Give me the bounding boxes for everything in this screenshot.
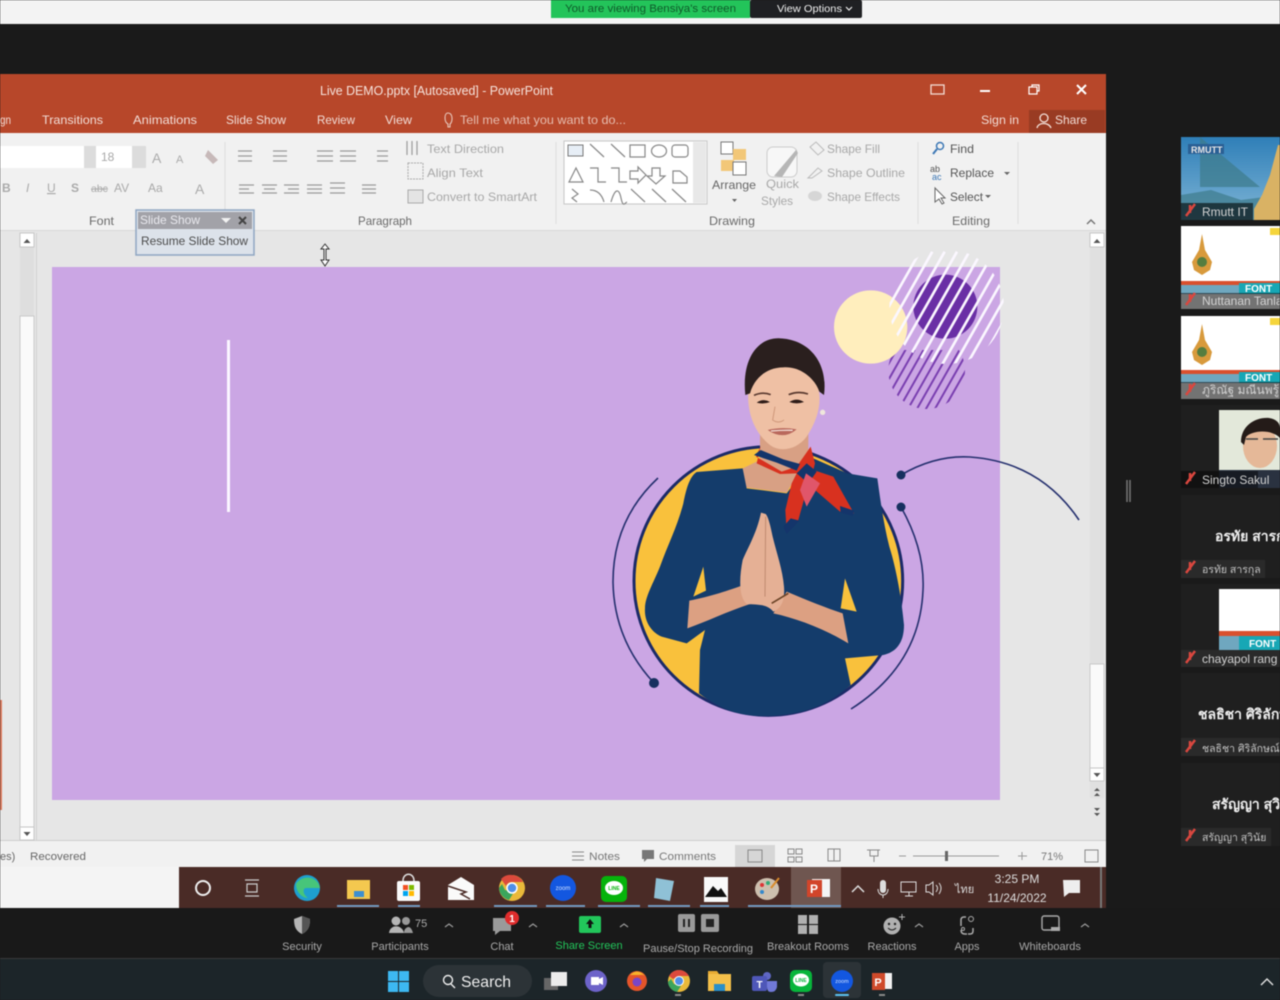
powerpoint title bar: [0, 74, 1106, 133]
face: [748, 365, 820, 449]
tile: Thai name 3: ชลธิชา ศิริลักษณ์: [1202, 742, 1280, 755]
ear and earring: [820, 410, 825, 415]
editing group: Select: [950, 190, 984, 204]
ribbon tabs: Sign in: [981, 113, 1019, 127]
font group: AV: [114, 181, 129, 195]
taskbar icons: P: [874, 977, 882, 989]
powerpoint status bar: 71%: [1041, 851, 1063, 863]
editing group: Editing: [952, 214, 990, 228]
bracelet: [772, 593, 788, 603]
chat: Chat: [490, 941, 514, 953]
tile: chayapol: FONT: [1249, 639, 1276, 650]
powerpoint title bar: Live DEMO.pptx [Autosaved] - PowerPoint: [320, 84, 554, 98]
ribbon tabs: Animations: [133, 113, 197, 127]
scarf: [756, 446, 854, 532]
font group: Aa: [148, 181, 163, 195]
app icon: chrome: [499, 875, 525, 901]
whiteboards: Whiteboards: [1019, 941, 1081, 953]
app icon: powerpoint: [807, 879, 830, 897]
purple striped circle: [888, 350, 966, 410]
zoom sharing banner: View Options: [777, 3, 842, 15]
powerpoint status bar: [0, 841, 1106, 867]
powerpoint status bar: es): [0, 851, 15, 863]
taskbar icons: LINE: [795, 978, 807, 984]
security: [282, 916, 322, 953]
app icon: edge: [294, 875, 320, 901]
connector arcs with dots: [613, 457, 1079, 709]
slide background: [52, 267, 1000, 800]
paragraph group: [238, 141, 538, 228]
tile: Rmutt IT: Rmutt IT: [1202, 205, 1249, 219]
tile: chayapol: chayapol rang: [1202, 652, 1277, 666]
brows: [754, 392, 808, 395]
slide show floating toolbar: [136, 210, 254, 255]
navy dress: [645, 458, 904, 716]
taskbar icons: T: [756, 980, 763, 991]
editing group: ac: [932, 172, 942, 182]
tile: Thai name 1: ภูริณัฐ มณีนพรู้: [1202, 383, 1280, 398]
windows logo: [388, 971, 409, 992]
tile: Thai name 4: [1181, 796, 1280, 846]
forearms: [687, 585, 848, 643]
participants: [371, 916, 429, 953]
hair: [745, 338, 825, 395]
zoom sharing banner: You are viewing Bensiya's screen: [565, 3, 736, 15]
security: Security: [282, 941, 322, 953]
mouse i-beam cursor: [321, 244, 329, 266]
search box: [423, 965, 532, 997]
praying hands: [740, 513, 784, 612]
tile: Rmutt IT: [1181, 137, 1280, 220]
app icon: photos: [704, 877, 728, 902]
presenter photo in circle: [634, 338, 904, 716]
zoom sharing banner: [0, 0, 1280, 24]
powerpoint status bar: Comments: [659, 851, 717, 863]
drawing group: Styles: [761, 194, 793, 208]
neck: [743, 430, 808, 493]
search box: Search: [461, 974, 511, 991]
share screen: [555, 916, 623, 952]
tile: chayapol: [1181, 584, 1280, 667]
app icon: store: [397, 874, 420, 901]
participant gallery: [1181, 137, 1280, 846]
windows taskbar (remote): 11/24/2022: [987, 891, 1047, 905]
cream circle: [834, 290, 907, 364]
tile: Thai name 2: [1181, 528, 1280, 578]
tile: Thai name 1: [1181, 316, 1280, 399]
editing group: Find: [950, 142, 974, 156]
ribbon tabs: gn: [0, 113, 11, 127]
ribbon tabs: Share: [1055, 113, 1087, 127]
apps: Apps: [954, 941, 980, 953]
font group: abc: [91, 183, 108, 195]
share screen: Share Screen: [555, 940, 623, 952]
yellow gaps: [693, 567, 857, 612]
yellow circle: [634, 447, 903, 715]
app icon: zoom: zoom: [556, 886, 570, 892]
editing group: ab: [930, 164, 940, 174]
ribbon tabs: Slide Show: [226, 113, 286, 127]
decorative circles: [834, 251, 1004, 410]
tile: Thai name 1: FONT: [1245, 373, 1272, 384]
app icon: viewer: [654, 878, 674, 901]
nose shadow: [773, 407, 784, 422]
recording: [643, 914, 753, 955]
paragraph group: Convert to SmartArt: [427, 190, 538, 204]
chat: 1: [509, 914, 515, 925]
taskbar icons: zoom: [835, 979, 849, 985]
ribbon tabs: Review: [317, 113, 355, 127]
font group: I: [26, 181, 30, 195]
windows taskbar (remote): 3:25 PM: [995, 872, 1039, 886]
tile: Nuttanan: FONT: [1245, 284, 1272, 295]
app icon: powerpoint: P: [810, 882, 818, 896]
app icon: line: [601, 876, 627, 902]
tile: Rmutt IT: RMUTT: [1191, 145, 1223, 155]
paragraph group: Paragraph: [358, 214, 412, 228]
drawing group: Arrange: [712, 178, 756, 192]
font group: B: [2, 181, 11, 195]
participants: Participants: [371, 941, 429, 953]
breakout rooms: [767, 915, 849, 953]
windows taskbar (remote): [0, 867, 1106, 908]
font group: [0, 146, 218, 228]
drawing group: Quick: [766, 177, 800, 191]
recording: Pause/Stop Recording: [643, 943, 753, 955]
right scrollbar: [1090, 233, 1104, 816]
zoom toolbar: [0, 908, 1280, 959]
editing group: Replace: [950, 166, 994, 180]
ribbon tabs: [0, 110, 1105, 133]
left scrollbar: [20, 233, 34, 840]
app icon: paint: [755, 878, 779, 900]
font group: S: [71, 181, 79, 195]
font group: A: [176, 154, 184, 166]
font group: Font: [89, 214, 115, 228]
dark purple circle: [913, 275, 977, 339]
app icon: mail: [448, 877, 474, 900]
ribbon tabs: Tell me what you want to do...: [460, 113, 626, 127]
app icon: explorer: [347, 880, 370, 899]
editing group: [930, 142, 1095, 228]
white stripes: [888, 251, 1004, 365]
slide show floating toolbar: Slide Show: [140, 213, 200, 227]
tile: Thai name 3: [1181, 706, 1280, 756]
drawing group: Shape Outline: [827, 166, 905, 180]
slide show floating toolbar: Resume Slide Show: [141, 234, 248, 248]
breakout rooms: Breakout Rooms: [767, 941, 849, 953]
app icon: zoom: [550, 875, 576, 901]
app icon: line: LINE: [608, 886, 620, 892]
local windows taskbar: [0, 959, 1280, 1000]
smile: [768, 428, 797, 435]
drawing group: [564, 141, 905, 228]
powerpoint status bar: Recovered: [30, 851, 86, 863]
font group: A: [195, 181, 205, 197]
reactions: [868, 914, 917, 953]
tile: Singto Sakul: [1181, 405, 1280, 488]
paragraph group: Align Text: [427, 166, 484, 180]
font group: 18: [101, 150, 115, 164]
ribbon tabs: Transitions: [42, 113, 103, 127]
paragraph group: Text Direction: [427, 142, 504, 156]
ribbon panel: [0, 133, 1106, 231]
windows taskbar (remote): ไทย: [954, 883, 974, 896]
drawing group: Shape Effects: [827, 190, 900, 204]
taskbar icons: [544, 962, 1273, 998]
drawing group: Shape Fill: [827, 142, 880, 156]
apps: [954, 916, 980, 953]
panel divider handle: [1127, 480, 1130, 502]
participants: 75: [415, 918, 427, 930]
tile: Singto Sakul: Singto Sakul: [1202, 473, 1269, 487]
editor workspace: [0, 231, 1106, 841]
tile: Thai name 4: สรัญญา สุวินัย: [1202, 832, 1266, 844]
font group: U: [47, 181, 56, 195]
chat: [490, 911, 519, 953]
powerpoint status bar: Notes: [589, 851, 621, 863]
eyes: [757, 400, 804, 404]
tile: Thai name 2: อรทัย สารกุล: [1202, 564, 1261, 576]
slide text cursor: [227, 340, 230, 512]
tile: Nuttanan: [1181, 226, 1280, 309]
font group: A: [152, 150, 162, 166]
drawing group: Drawing: [709, 214, 755, 228]
ribbon tabs: View: [385, 113, 412, 127]
reactions: Reactions: [868, 941, 917, 953]
whiteboards: [1019, 916, 1081, 953]
